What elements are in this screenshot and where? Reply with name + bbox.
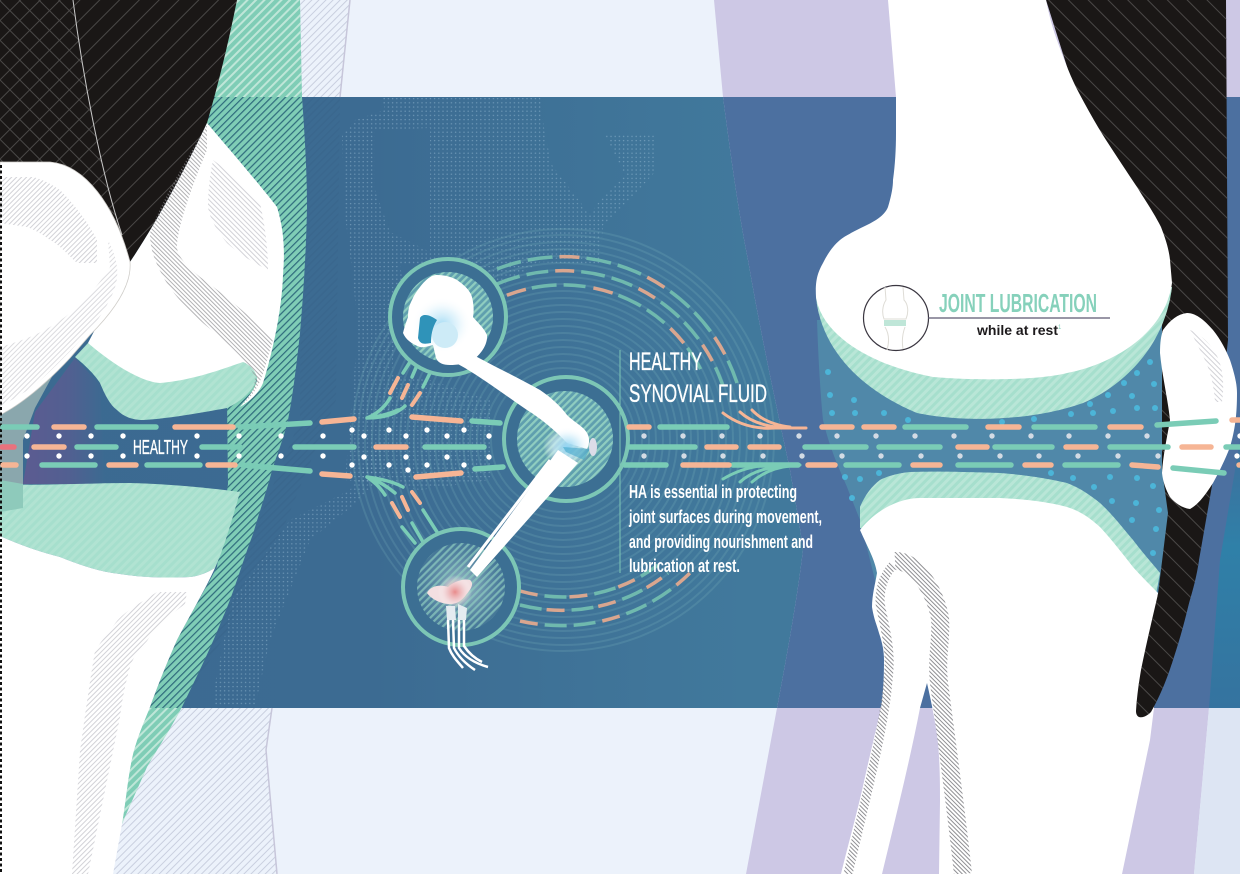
icon: knee joint glow [543,427,597,467]
body text: HA is essential in protecting [629,482,797,502]
icon: mini knee [864,286,928,350]
body text [628,482,822,576]
heading: healthy synovial fluid: SYNOVIAL FLUID [629,380,767,408]
heading divider [619,350,621,573]
lavender column behind right knee [714,0,1240,874]
rule [928,317,1110,319]
body text: and providing nourishment and [629,532,813,552]
pale hatched strips beside left leg [113,0,350,874]
heading: healthy synovial fluid [629,348,767,408]
tibial cartilage right [860,472,1160,600]
right knee illustration [816,0,1237,874]
converging green streaks [723,465,800,482]
left femur condyle [0,162,130,415]
joint circle: ankle [403,529,519,645]
icon: femur [447,346,589,449]
mint cartilage on femur [75,343,257,420]
icon: fibula [468,460,550,567]
converging peach streaks [723,410,806,428]
lower circular dashed arcs [520,565,693,626]
green hatched stripe [122,0,307,824]
body text: joint surfaces during movement, [628,507,822,527]
leg skeleton [403,275,597,670]
concentric rings [352,229,774,651]
synovial cavity with dots [817,320,1168,600]
black muscle shape right [1046,0,1228,717]
joint circle: hip [390,259,506,375]
black tip over tibia [1136,560,1199,717]
tibia and fibula right [841,498,1158,874]
halftone pelvis and leg ghost [214,97,655,706]
left tibia [0,536,215,874]
crop mark [0,165,2,874]
bottom left branch dashes [367,477,437,543]
patella [1160,313,1237,509]
heading: healthy synovial fluid: HEALTHY [629,348,702,376]
purple shadow and hatch at left edge [0,358,105,484]
tibia cartilage [0,480,240,578]
icon: pelvis [403,275,487,365]
label: healthy: HEALTHY [133,437,188,459]
femur cartilage [816,287,1172,419]
heading: joint lubrication: JOINT LUBRICATION [939,288,1097,318]
central blue band [0,97,1240,708]
joint lubrication label [864,286,1110,350]
joint circle: knee [504,377,628,501]
body text: lubrication at rest. [629,556,740,576]
icon: tibia [470,450,578,577]
icon: foot [427,575,488,670]
upper circular dashed arcs [497,257,737,386]
green dashes [3,421,1240,473]
peach dashes [3,417,1240,477]
top left branch dashes [367,362,430,418]
black muscle shape [0,0,237,300]
tail of healthy mid row in red [2,444,14,450]
left knee illustration [0,0,307,874]
footnote marker: 1 [1058,325,1062,331]
subheading: while at rest: while at rest [976,322,1058,338]
right femur [816,0,1172,379]
white dots [24,427,1240,473]
right femur condyle [88,123,284,407]
flow: dashes and dots across the page [2,410,1240,482]
